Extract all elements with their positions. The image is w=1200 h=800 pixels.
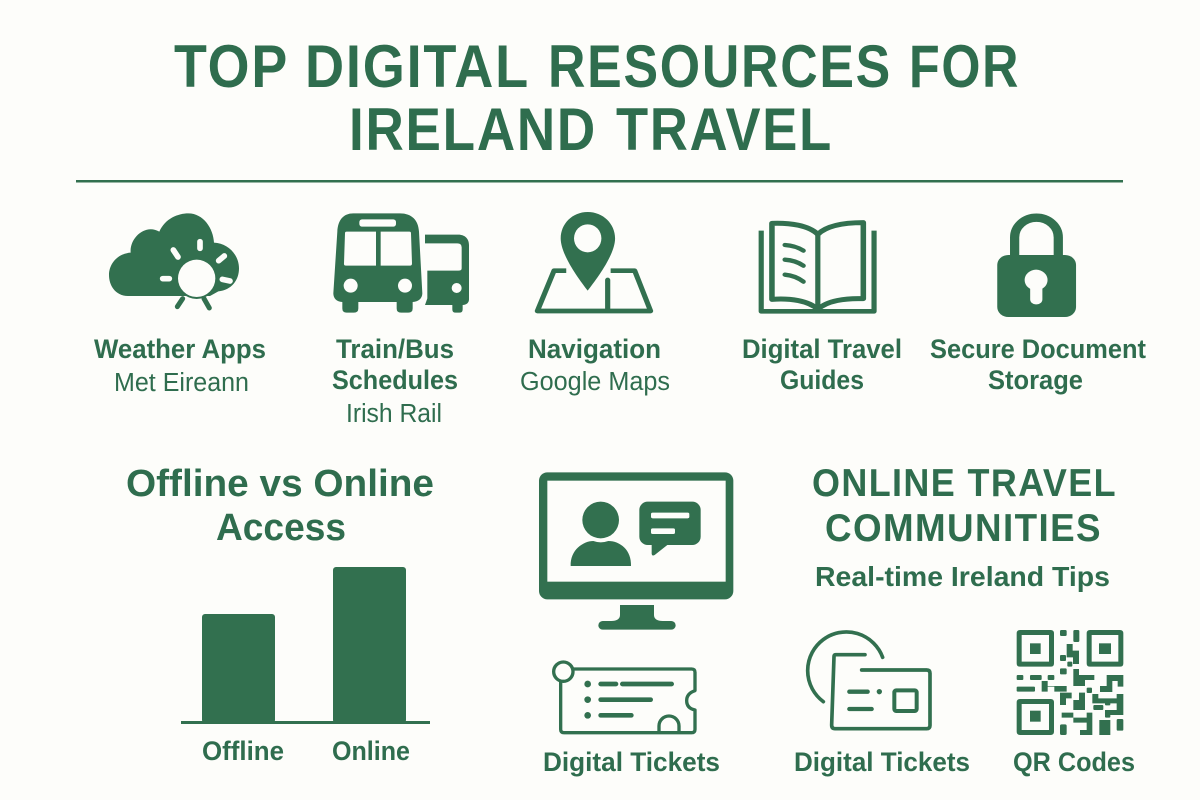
icon: monitor with person and chat bubble bbox=[539, 472, 733, 630]
label: train and bus schedules bbox=[332, 334, 458, 428]
icon: open book bbox=[761, 223, 874, 311]
label: train and bus schedules: Schedules bbox=[332, 365, 458, 395]
icon: train and bus bbox=[333, 213, 469, 313]
icon: QR code bbox=[1017, 630, 1123, 735]
heading: online travel communities: COMMUNITIES bbox=[825, 507, 1102, 550]
label: train and bus schedules: Train/Bus bbox=[336, 334, 454, 364]
title: TRAVEL bbox=[616, 96, 833, 163]
title: RESOURCES bbox=[548, 33, 892, 100]
label: weather apps bbox=[94, 334, 266, 397]
bar chart: offline vs online bbox=[181, 567, 430, 766]
label: navigation: Navigation bbox=[528, 334, 661, 364]
title: TOP bbox=[174, 33, 289, 100]
label: navigation bbox=[520, 334, 670, 396]
label: digital travel guides bbox=[742, 334, 902, 395]
title: IRELAND bbox=[349, 96, 597, 163]
label: secure document storage: Storage bbox=[988, 365, 1083, 395]
title: FOR bbox=[909, 33, 1020, 100]
label: weather apps: Met Eireann bbox=[114, 369, 249, 397]
heading: online travel communities bbox=[812, 462, 1117, 592]
icon: padlock bbox=[997, 218, 1076, 317]
label: QR codes: QR Codes bbox=[1013, 747, 1135, 777]
heading: online travel communities: Real-time Ireland Tips bbox=[815, 561, 1110, 592]
icon: digital ticket bbox=[554, 662, 695, 733]
title: DIGITAL bbox=[305, 33, 530, 100]
label: navigation: Google Maps bbox=[520, 368, 670, 396]
icon: digital ticket card bbox=[808, 632, 930, 729]
label: digital tickets right: Digital Tickets bbox=[794, 747, 970, 777]
bar chart: offline vs online: Offline bbox=[202, 736, 284, 766]
heading: offline vs online access bbox=[126, 463, 434, 549]
bar chart: offline vs online: Online bbox=[332, 736, 410, 766]
label: secure document storage bbox=[930, 334, 1146, 395]
icon: map with location pin bbox=[537, 212, 651, 311]
label: digital travel guides: Guides bbox=[780, 365, 864, 395]
label: digital travel guides: Digital Travel bbox=[742, 334, 902, 364]
heading: offline vs online access: Offline vs Online bbox=[126, 463, 434, 505]
label: digital tickets left: Digital Tickets bbox=[543, 747, 720, 777]
heading: online travel communities: ONLINE TRAVEL bbox=[812, 462, 1117, 505]
label: train and bus schedules: Irish Rail bbox=[346, 400, 442, 428]
icon: weather cloud and sun bbox=[109, 213, 239, 308]
heading: offline vs online access: Access bbox=[216, 507, 346, 549]
title bbox=[174, 33, 1020, 163]
label: secure document storage: Secure Document bbox=[930, 334, 1146, 364]
label: weather apps: Weather Apps bbox=[94, 334, 266, 364]
